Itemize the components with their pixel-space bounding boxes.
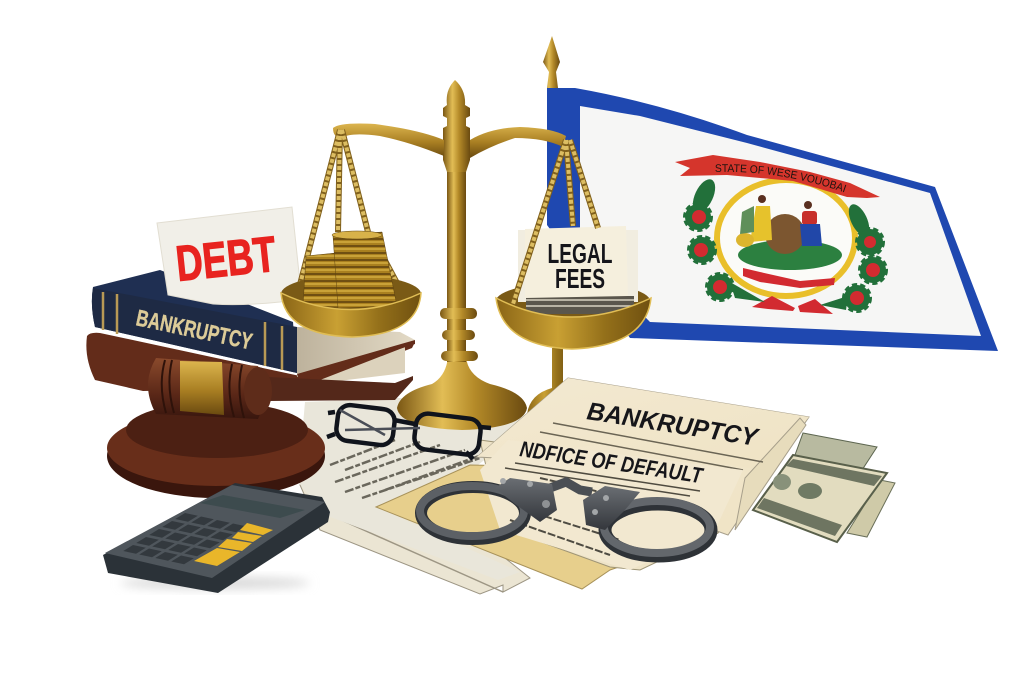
debt card: DEBT [173, 226, 279, 292]
notice of default: NDFICE OF DEFAULT [518, 436, 705, 488]
right pan stand [527, 348, 570, 416]
flag of West Virginia [543, 36, 998, 351]
book spine [92, 288, 297, 373]
yellow keys [194, 523, 273, 566]
number keys [123, 513, 246, 564]
bankruptcy notice [477, 378, 809, 535]
screen [200, 495, 305, 518]
legal fees papers [518, 226, 638, 314]
yellow folder [376, 465, 750, 589]
handle [268, 376, 413, 401]
coin stack [303, 231, 397, 308]
sound block [107, 402, 325, 498]
main bill [753, 455, 887, 542]
seal red ribbon [743, 268, 835, 288]
right laurel branch [820, 201, 886, 311]
right pan [496, 298, 651, 349]
scale base [397, 357, 527, 430]
seal banner: STATE OF WESE VOUOBAI [716, 164, 846, 192]
spine title: BANKRUPTCY [134, 304, 255, 354]
money [753, 433, 895, 542]
handwritten lines [330, 440, 500, 498]
legal fees papers: LEGAL [548, 238, 612, 269]
left pan back [281, 275, 421, 313]
seal banner [675, 155, 880, 198]
flag seal [675, 155, 888, 314]
seal scene [736, 195, 842, 270]
seal base ribbons [752, 296, 833, 314]
left laurel branch [685, 176, 765, 302]
scale beam [333, 124, 566, 158]
debt card [157, 207, 301, 305]
right pan back [496, 282, 650, 320]
notice sheet [480, 440, 745, 570]
gavel [107, 358, 413, 498]
balance scale [281, 80, 651, 430]
handcuffs [420, 478, 711, 556]
legal fees papers: FEES [555, 263, 605, 294]
scale post [440, 80, 478, 362]
eyeglasses [327, 404, 491, 459]
left pan [281, 293, 421, 337]
left ropes [296, 130, 405, 300]
seal wreath ring [717, 180, 855, 296]
back papers [298, 398, 535, 594]
bankruptcy notice: BANKRUPTCY [585, 397, 762, 452]
right ropes [513, 140, 598, 304]
notice of default [480, 436, 743, 570]
flag finial [543, 36, 560, 88]
brown book [86, 333, 415, 391]
navy book [92, 270, 415, 381]
head [148, 358, 265, 419]
law books [86, 270, 415, 391]
calculator [103, 483, 330, 593]
